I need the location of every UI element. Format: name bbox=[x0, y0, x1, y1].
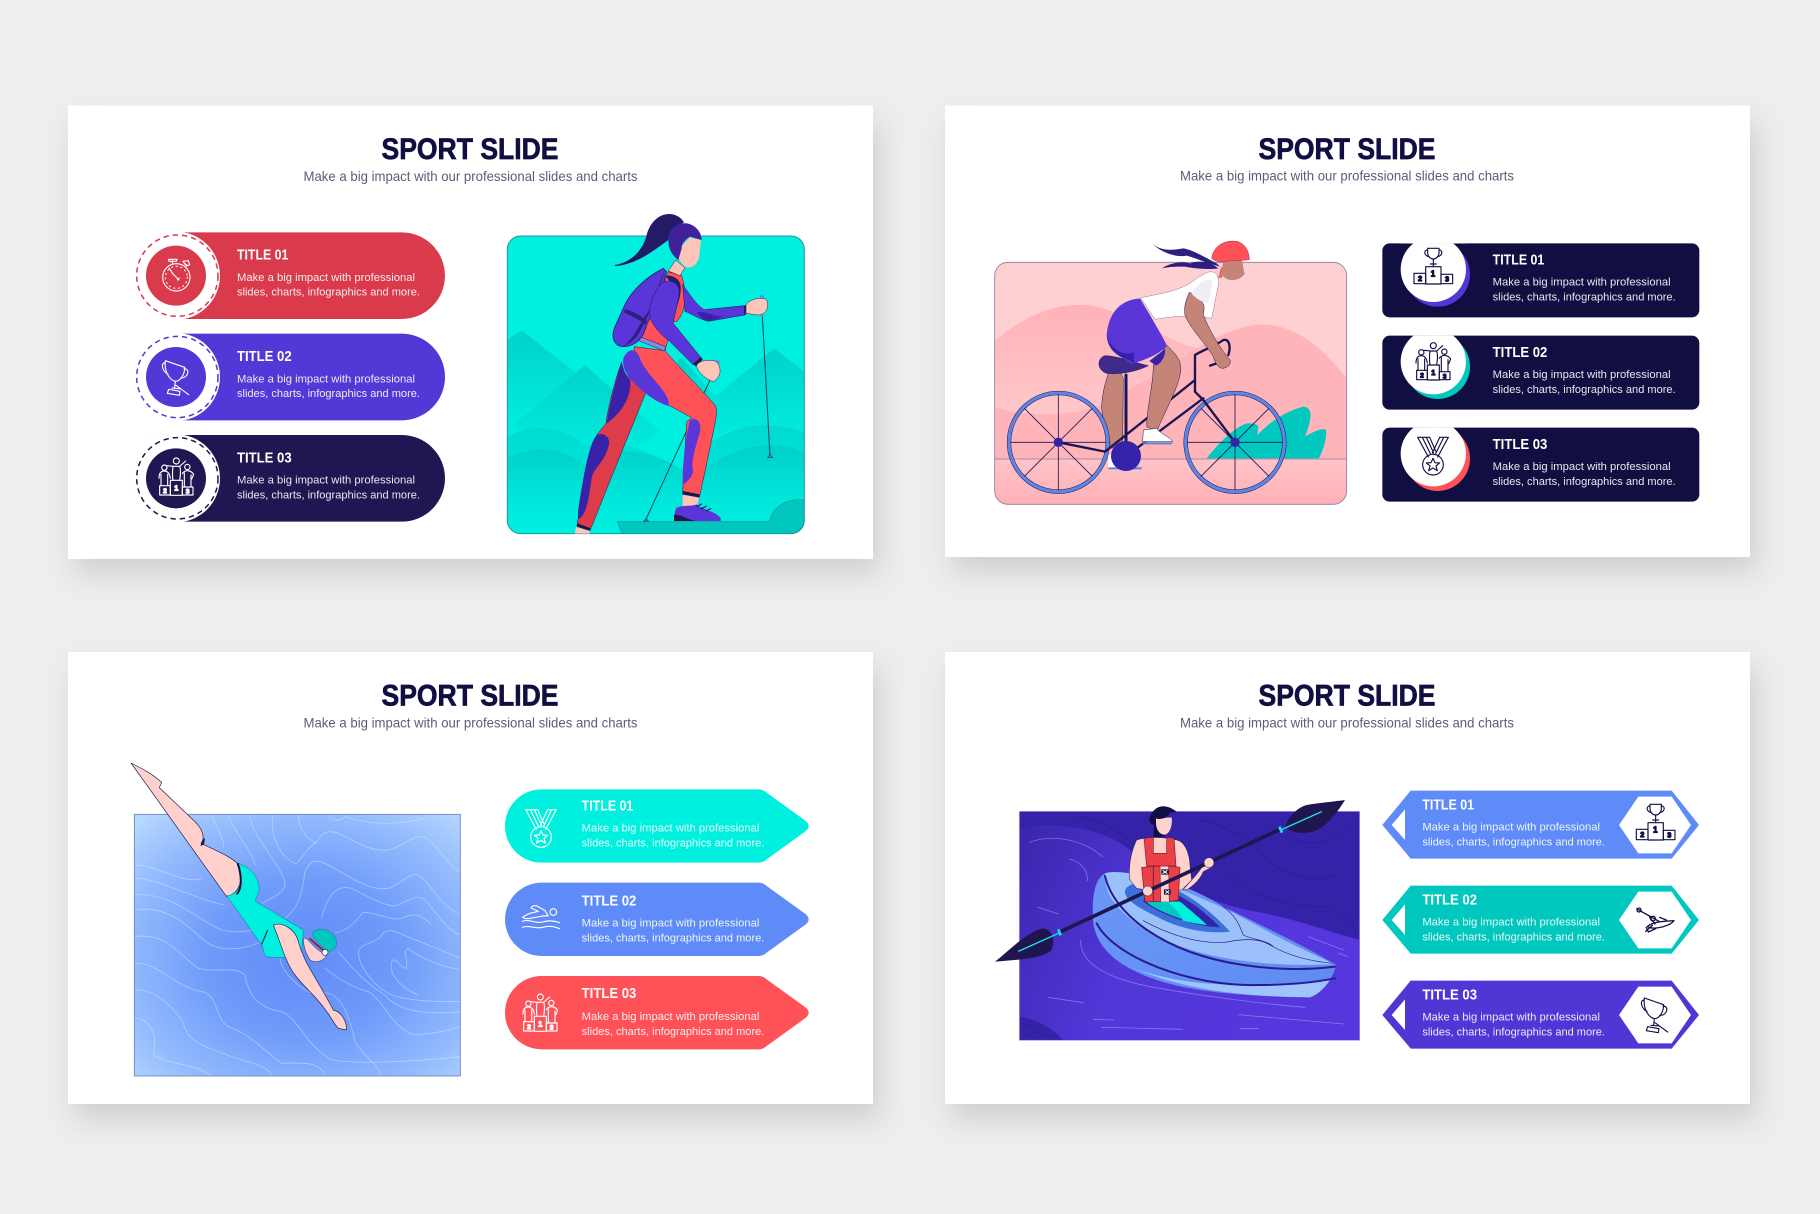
back leg bbox=[577, 362, 646, 529]
suit bbox=[227, 863, 303, 958]
front leg bbox=[632, 347, 716, 495]
item: hexagon 03: slides, charts, infographics and more. bbox=[1422, 1026, 1605, 1038]
panel: slide 1 hiking bbox=[68, 106, 873, 559]
icon: medal bbox=[526, 810, 556, 847]
text: slide 3 subtitle: Make a big impact with our professional slides and charts bbox=[304, 714, 638, 730]
item: pill 02 bbox=[132, 333, 445, 421]
text: slide 1 subtitle: Make a big impact with our professional slides and charts bbox=[304, 168, 638, 184]
item: bar 02 bbox=[1382, 329, 1699, 410]
item: pill 02: slides, charts, infographics and more. bbox=[237, 388, 420, 400]
leg bbox=[131, 763, 241, 897]
item: hexagon 01: slides, charts, infographics and more. bbox=[1422, 836, 1605, 848]
item: arrow 01 bbox=[505, 789, 809, 863]
item: arrow 02: TITLE 02 bbox=[582, 893, 636, 910]
icon: medal bbox=[1418, 437, 1448, 475]
item: pill 03: Make a big impact with professional bbox=[237, 475, 415, 487]
item: hexagon 02 bbox=[1382, 886, 1699, 954]
item: hexagon 02: slides, charts, infographics and more. bbox=[1422, 932, 1605, 944]
item: hexagon 02: Make a big impact with professional bbox=[1422, 917, 1600, 929]
item: pill 01 bbox=[132, 232, 445, 320]
head bbox=[1153, 823, 1167, 837]
torso bbox=[639, 272, 685, 351]
legs in cockpit bbox=[1146, 902, 1207, 925]
hands bbox=[1204, 858, 1214, 868]
item: hexagon 01: TITLE 01 bbox=[1422, 797, 1474, 814]
panel: slide 3 swimming bbox=[68, 652, 873, 1104]
list: slide 3 arrows bbox=[505, 789, 809, 1049]
wheels bbox=[1009, 393, 1284, 492]
item: arrow 01: TITLE 01 bbox=[582, 798, 633, 815]
illustration: hiker bbox=[507, 214, 804, 535]
item: arrow 01: Make a big impact with professional bbox=[582, 823, 759, 835]
item: bar 01: TITLE 01 bbox=[1493, 252, 1544, 269]
saddle and front leg bbox=[1099, 356, 1148, 374]
item: pill 03: slides, charts, infographics and more. bbox=[237, 489, 420, 501]
icon: swimmer bbox=[522, 906, 560, 929]
icon: podium people bbox=[159, 458, 194, 496]
item: bar 02: slides, charts, infographics and more. bbox=[1493, 384, 1676, 396]
head bbox=[615, 214, 684, 266]
item: arrow 03: Make a big impact with professional bbox=[582, 1011, 759, 1023]
item: hexagon 01 bbox=[1382, 791, 1699, 859]
kayaker body bbox=[1129, 837, 1192, 890]
item: hexagon 03: Make a big impact with professional bbox=[1422, 1011, 1600, 1023]
backpack bbox=[613, 268, 667, 347]
rear arm bbox=[683, 284, 745, 321]
item: pill 01: slides, charts, infographics and more. bbox=[237, 287, 420, 299]
text: slide 2 subtitle: Make a big impact with our professional slides and charts bbox=[1180, 168, 1514, 184]
list: slide 4 hexagons bbox=[1382, 791, 1699, 1049]
item: pill 01: Make a big impact with professional bbox=[237, 272, 415, 284]
text: slide 4 subtitle: Make a big impact with our professional slides and charts bbox=[1180, 714, 1514, 730]
icon: stopwatch bbox=[163, 259, 190, 291]
item: pill 03: TITLE 03 bbox=[237, 450, 292, 467]
slide shadows bbox=[74, 122, 1757, 1120]
item: pill 02: Make a big impact with professional bbox=[237, 373, 415, 385]
icon: tilted trophy bbox=[162, 361, 189, 395]
shirt bbox=[1141, 272, 1219, 319]
panel: slide 2 cycling bbox=[945, 106, 1750, 557]
rear leg bbox=[1102, 358, 1123, 448]
illustration: cyclist bbox=[995, 241, 1347, 506]
arm bbox=[1185, 292, 1230, 368]
icon: podium trophy bbox=[1636, 804, 1675, 840]
heading: slide 3 title: SPORT SLIDE bbox=[382, 680, 558, 712]
item: hexagon 01: Make a big impact with professional bbox=[1422, 821, 1600, 833]
head and braids bbox=[1153, 244, 1220, 269]
item: bar 03 bbox=[1382, 421, 1699, 502]
item: arrow 02 bbox=[505, 883, 809, 956]
panel: slide 4 kayaking bbox=[945, 652, 1750, 1104]
icon: podium trophy bbox=[1414, 248, 1453, 284]
heading: slide 1 title: SPORT SLIDE bbox=[382, 133, 558, 166]
shorts bbox=[1107, 298, 1167, 363]
item: arrow 01: slides, charts, infographics and more. bbox=[582, 838, 764, 850]
item: arrow 02: Make a big impact with professional bbox=[582, 918, 759, 930]
item: bar 02: Make a big impact with professional bbox=[1493, 369, 1671, 381]
sleeve bbox=[1192, 280, 1212, 303]
paddle bbox=[1058, 829, 1280, 933]
item: pill 01: TITLE 01 bbox=[237, 247, 288, 264]
icon: kayak bbox=[1637, 908, 1674, 932]
kayak hull bbox=[1093, 873, 1336, 997]
item: bar 02: TITLE 02 bbox=[1493, 344, 1547, 361]
near arm bbox=[649, 281, 702, 365]
icon: tilted trophy bbox=[1641, 998, 1668, 1033]
item: bar 01: slides, charts, infographics and more. bbox=[1493, 292, 1676, 304]
icon: podium people bbox=[1416, 343, 1451, 380]
item: arrow 03: slides, charts, infographics and more. bbox=[582, 1026, 764, 1038]
heading: slide 4 title: SPORT SLIDE bbox=[1258, 680, 1436, 712]
head bbox=[303, 938, 327, 962]
item: arrow 02: slides, charts, infographics and more. bbox=[582, 933, 764, 945]
heading: slide 2 title: SPORT SLIDE bbox=[1258, 133, 1436, 166]
item: hexagon 03 bbox=[1382, 981, 1699, 1049]
item: hexagon 02: TITLE 02 bbox=[1422, 892, 1477, 909]
item: bar 03: TITLE 03 bbox=[1493, 436, 1547, 453]
list: slide 1 pills bbox=[132, 232, 445, 522]
item: bar 01: Make a big impact with professional bbox=[1493, 277, 1671, 289]
icon: podium people bbox=[523, 994, 558, 1032]
arm bbox=[273, 924, 347, 1030]
item: arrow 03: TITLE 03 bbox=[582, 985, 636, 1002]
item: bar 03: Make a big impact with professional bbox=[1493, 461, 1671, 473]
poles bbox=[646, 315, 770, 520]
item: arrow 03 bbox=[505, 976, 809, 1049]
item: bar 01 bbox=[1382, 237, 1699, 317]
illustration: swimmer bbox=[131, 763, 460, 1076]
item: bar 03: slides, charts, infographics and more. bbox=[1493, 476, 1676, 488]
illustration: kayaker bbox=[995, 800, 1359, 1040]
frame bbox=[1058, 340, 1235, 455]
list: slide 2 bars bbox=[1382, 237, 1699, 502]
item: pill 03 bbox=[132, 434, 445, 522]
item: hexagon 03: TITLE 03 bbox=[1422, 987, 1477, 1004]
life vest bbox=[1144, 837, 1176, 866]
item: pill 02: TITLE 02 bbox=[237, 348, 292, 365]
